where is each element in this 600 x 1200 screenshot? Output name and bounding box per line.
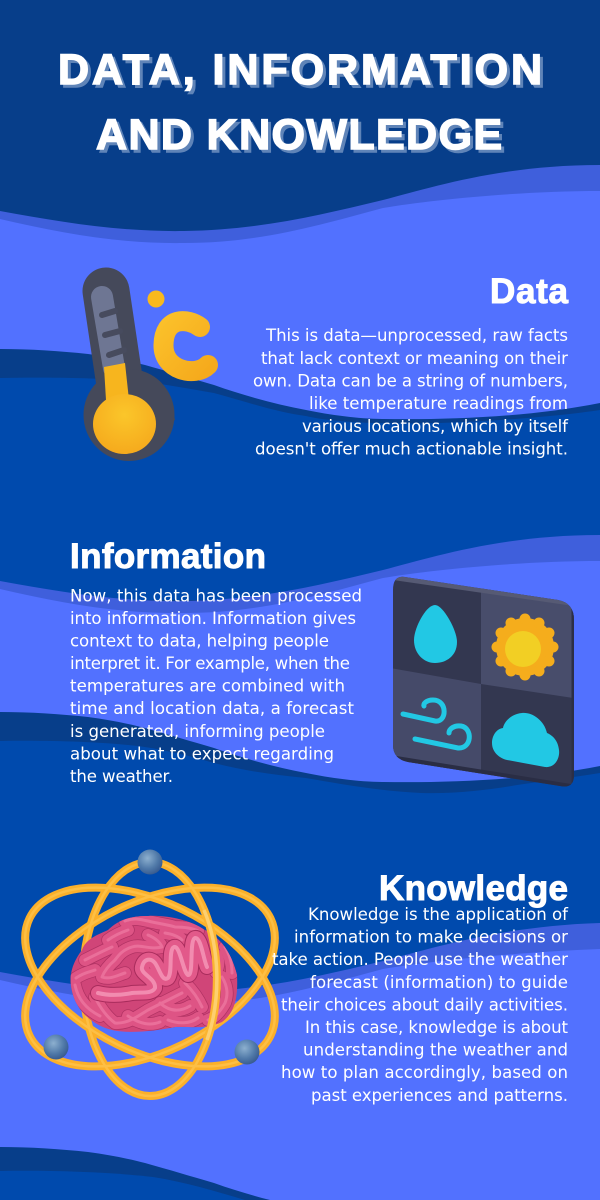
text block: information description: context to data, helping people xyxy=(70,632,329,650)
heading: Knowledge: Knowledge xyxy=(379,869,568,908)
text block: knowledge description: their choices about daily activities. xyxy=(281,995,568,1014)
icon: cloud xyxy=(492,713,559,767)
text block: information description: into information. Information gives xyxy=(70,609,356,628)
text block: information description xyxy=(70,586,362,786)
heading: Data: Data xyxy=(490,272,569,311)
text block: knowledge description: take action. People use the weather xyxy=(272,950,568,969)
text block: information description: is generated, informing people xyxy=(70,722,325,741)
text block: knowledge description: understanding the weather and xyxy=(303,1041,568,1060)
panel: data xyxy=(84,272,569,461)
text block: information description: Now, this data has been processed xyxy=(70,586,362,606)
text block: knowledge description: In this case, knowledge is about xyxy=(305,1018,568,1037)
text block: information description: interpret it. For example, when the xyxy=(70,654,350,673)
text block: information description: time and location data, a forecast xyxy=(70,699,354,718)
icon: water drop xyxy=(414,605,457,663)
text block: information description: about what to expect regarding xyxy=(70,744,334,764)
text block: data description: that lack context or meaning on their xyxy=(261,349,568,368)
text block: data description: doesn't offer much actionable insight. xyxy=(255,440,568,458)
title: AND KNOWLEDGE xyxy=(96,111,502,159)
text block: knowledge description: forecast (information) to guide xyxy=(310,973,568,992)
icon: thermometer with celsius sign xyxy=(84,290,208,461)
text block: knowledge description: information to make decisions or xyxy=(294,928,568,947)
icon: wind xyxy=(403,700,469,748)
text block: data description: like temperature readings from xyxy=(309,394,568,413)
heading: Information: Information xyxy=(70,537,266,576)
text block: data description xyxy=(253,326,569,458)
text block: information description: temperatures are combined with xyxy=(70,676,345,696)
title xyxy=(58,46,542,159)
text block: data description: This is data—unprocessed, raw facts xyxy=(265,326,568,345)
text block: knowledge description: past experiences and patterns. xyxy=(311,1086,568,1105)
text block: data description: various locations, which by itself xyxy=(302,417,569,436)
text block: knowledge description: Knowledge is the application of xyxy=(308,905,569,924)
title: DATA, INFORMATION xyxy=(58,46,542,94)
text block: knowledge description xyxy=(272,905,569,1105)
panel: information xyxy=(70,537,580,795)
atom nodes xyxy=(44,850,260,1064)
icon: brain in atom orbits xyxy=(21,850,279,1100)
orbit front arc xyxy=(204,910,217,1040)
icon: weather panel xyxy=(393,576,574,786)
icon: sun xyxy=(492,614,558,680)
panel: knowledge xyxy=(0,850,569,1105)
brain xyxy=(71,916,237,1032)
text block: data description: own. Data can be a string of numbers, xyxy=(253,372,568,390)
text block: knowledge description: how to plan accordingly, based on xyxy=(281,1063,568,1082)
text block: information description: the weather. xyxy=(70,767,173,786)
